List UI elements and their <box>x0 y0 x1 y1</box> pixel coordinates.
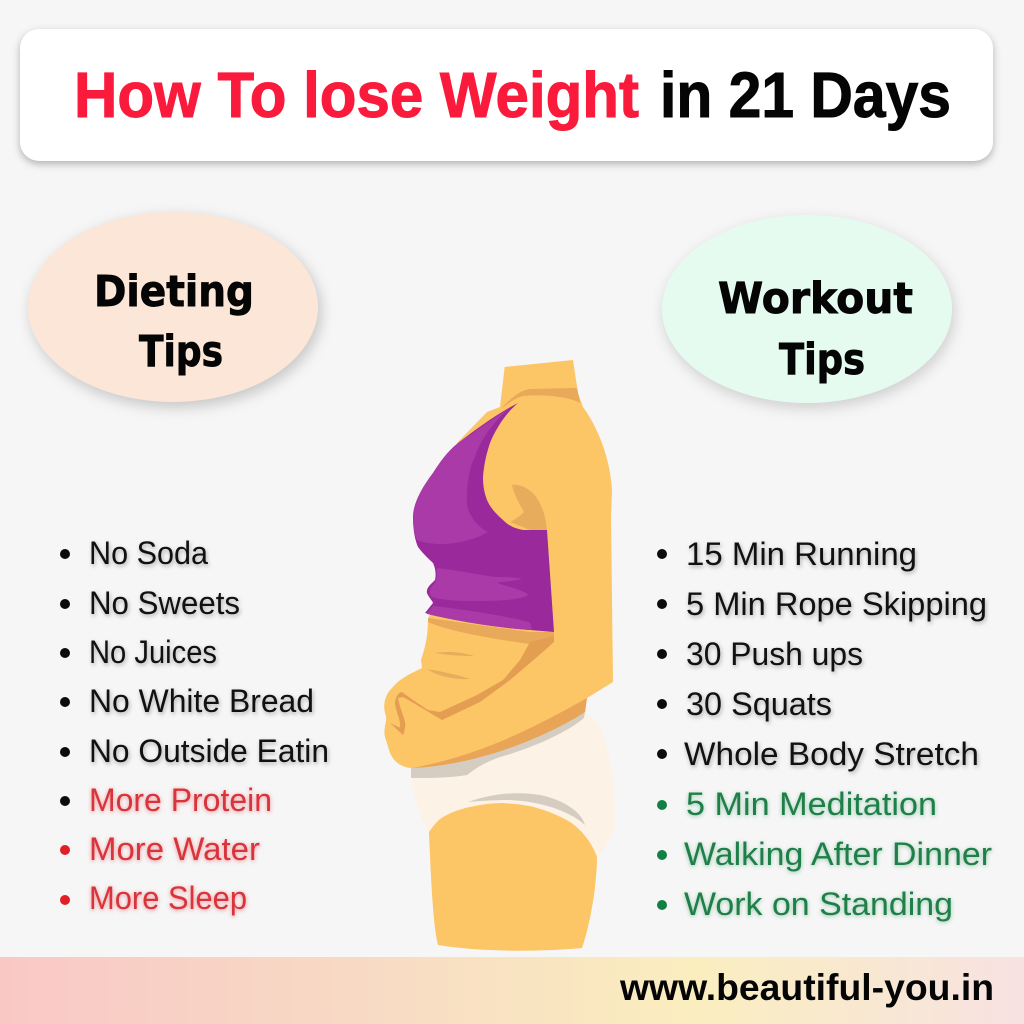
title: black part: in 21 Days <box>660 59 951 131</box>
title card <box>20 29 993 161</box>
thigh <box>429 803 597 951</box>
purple top <box>413 403 554 632</box>
forearm fold <box>390 636 554 735</box>
no-list items: No Outside Eatin <box>89 733 329 769</box>
underwear <box>411 712 615 857</box>
belly lower shade <box>413 698 587 768</box>
heading: tips: Tips <box>139 327 223 377</box>
more-list items: More Water <box>89 831 260 867</box>
habit items: Work on Standing <box>684 886 953 922</box>
armpit shade <box>510 485 547 531</box>
exercise items: Whole Body Stretch <box>684 736 979 772</box>
heading: tips: Tips <box>779 335 865 385</box>
exercise items: 5 Min Rope Skipping <box>686 586 987 622</box>
panel: workout tips oval <box>662 215 952 403</box>
belly wrinkle lower <box>427 669 470 679</box>
no-list items: No Soda <box>89 535 208 571</box>
neck shadow <box>502 388 580 408</box>
website url: www.beautiful-you.in <box>619 967 994 1008</box>
bullets: workout <box>657 549 667 910</box>
heading: workout: Workout <box>718 274 913 324</box>
exercise items: 15 Min Running <box>686 536 917 572</box>
heading: dieting: Dieting <box>94 267 254 317</box>
belly wrinkle upper <box>435 652 474 656</box>
exercise items: 30 Push ups <box>686 636 863 672</box>
top highlight: lower band <box>427 606 532 630</box>
torso and arm <box>384 360 613 768</box>
no-list items <box>89 535 329 769</box>
habit items: 5 Min Meditation <box>686 786 937 822</box>
more-list items <box>89 782 272 916</box>
no-list items: No Juices <box>89 634 217 670</box>
habit items <box>684 786 992 922</box>
exercise items <box>684 536 987 772</box>
no-list items: No Sweets <box>89 585 240 621</box>
panel: dieting tips oval <box>28 212 318 402</box>
bullets: dieting <box>60 549 70 905</box>
illustration: side view of female torso <box>384 360 615 951</box>
more-list items: More Protein <box>89 782 272 818</box>
no-list items: No White Bread <box>89 683 314 719</box>
exercise items: 30 Squats <box>686 686 832 722</box>
top highlight: upper band <box>430 568 528 601</box>
waistband shadow <box>411 705 586 778</box>
underwear crease <box>468 793 585 825</box>
list: workout tips <box>657 536 992 922</box>
habit items: Walking After Dinner <box>684 836 992 872</box>
shadow under top <box>428 618 554 644</box>
footer band <box>0 957 1024 1024</box>
title: red part: How To lose Weight <box>74 59 639 131</box>
list: dieting tips <box>60 535 329 916</box>
top highlight: cup <box>413 408 510 544</box>
more-list items: More Sleep <box>89 880 247 916</box>
